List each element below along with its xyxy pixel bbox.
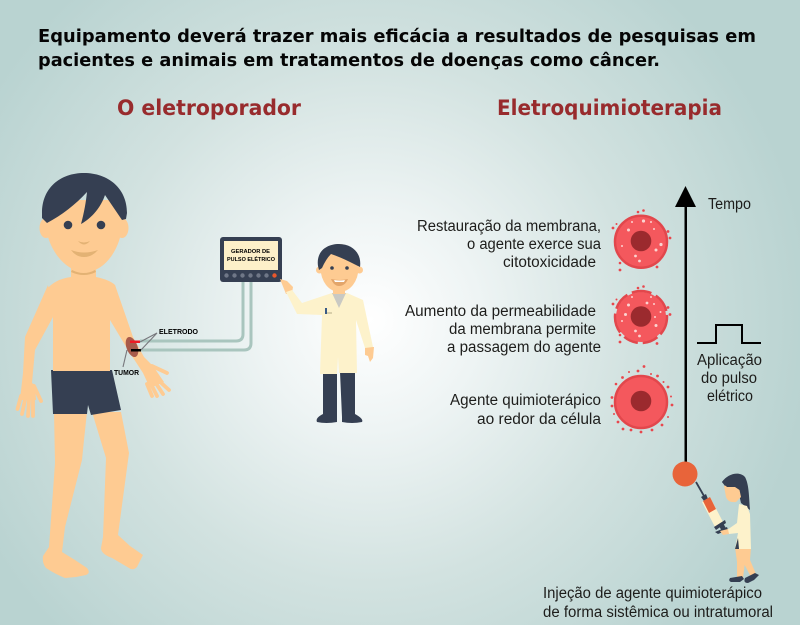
screen	[224, 241, 278, 270]
icon: electric pulse	[697, 325, 761, 343]
text: agent around the cell	[450, 392, 601, 428]
title: pacientes e animais em tratamentos de doenças como câncer.	[38, 51, 660, 71]
device: pulse generator	[220, 237, 282, 282]
legs	[43, 412, 143, 578]
cell: permeable membrane	[612, 285, 671, 345]
screen text	[227, 249, 276, 263]
text: injection caption: Injeção de agente quimioterápico	[543, 585, 762, 602]
shoes	[729, 573, 759, 583]
heading: Eletroquimioterapia: Eletroquimioterapia	[497, 96, 722, 120]
label: Tempo: Tempo	[708, 196, 751, 213]
text: membrane restoration: Restauração da membrana,	[417, 218, 601, 235]
buttons	[224, 273, 277, 278]
illustration: doctor	[280, 244, 374, 423]
text: injection caption: de forma sistêmica ou intratumoral	[543, 604, 773, 621]
text: increased permeability	[405, 303, 601, 356]
label: TUMOR: TUMOR	[114, 368, 140, 377]
hand	[720, 529, 729, 535]
injection point	[672, 462, 698, 486]
hair back	[722, 474, 750, 510]
hands	[280, 279, 374, 362]
text: increased permeability: da membrana permite	[449, 321, 596, 338]
tumor	[123, 335, 141, 359]
coat	[286, 290, 373, 374]
hair	[318, 244, 360, 270]
text: pulse application	[697, 352, 762, 405]
cell: agent around the cell	[611, 365, 673, 433]
face	[724, 483, 741, 502]
hair front	[722, 475, 743, 491]
text: pulse application: do pulso	[701, 370, 757, 387]
illustration: nurse	[720, 474, 759, 583]
neck and face	[316, 244, 363, 294]
cell: membrane restored	[612, 209, 671, 271]
screen text: PULSO ELÉTRICO	[227, 255, 276, 263]
nose and smile	[71, 241, 98, 257]
electrode cables	[140, 282, 251, 350]
text: increased permeability: a passagem do agente	[447, 339, 601, 356]
coat	[727, 504, 751, 549]
chin shadow	[71, 270, 96, 275]
illustration: patient	[18, 173, 169, 578]
text: pulse application: Aplicação	[697, 352, 762, 369]
text: agent around the cell: Agente quimioterápico	[450, 392, 601, 409]
ears	[40, 218, 128, 238]
electrode and tumor pointers	[123, 333, 157, 367]
eyes	[64, 221, 105, 229]
legs	[735, 547, 756, 578]
title: Equipamento deverá trazer mais eficácia a resultados de pesquisas em	[38, 27, 756, 47]
trousers	[323, 372, 355, 417]
screen text: GERADOR DE	[231, 249, 270, 255]
text: agent around the cell: ao redor da célula	[477, 411, 601, 428]
eyes	[330, 266, 349, 270]
shoes	[317, 414, 362, 423]
smile	[331, 279, 348, 286]
skirt slit	[735, 538, 739, 549]
collar	[332, 293, 346, 308]
heading: O eletroporador: O eletroporador	[117, 96, 302, 120]
time axis	[675, 186, 696, 466]
syringe	[696, 482, 728, 534]
shorts	[51, 370, 121, 415]
hair	[42, 173, 127, 224]
text: increased permeability: Aumento da permeabilidade	[405, 303, 596, 320]
pocket badge	[325, 308, 332, 314]
title	[38, 27, 756, 71]
label: ELETRODO: ELETRODO	[159, 327, 198, 336]
electrodes	[130, 340, 141, 352]
text: membrane restoration	[417, 218, 601, 271]
text: membrane restoration: citotoxicidade	[503, 254, 596, 271]
text: membrane restoration: o agente exerce sua	[467, 236, 601, 253]
torso	[46, 268, 120, 371]
face	[46, 200, 122, 272]
text: pulse application: elétrico	[707, 388, 753, 405]
text: injection caption	[543, 585, 773, 621]
arms and hands	[20, 285, 164, 400]
